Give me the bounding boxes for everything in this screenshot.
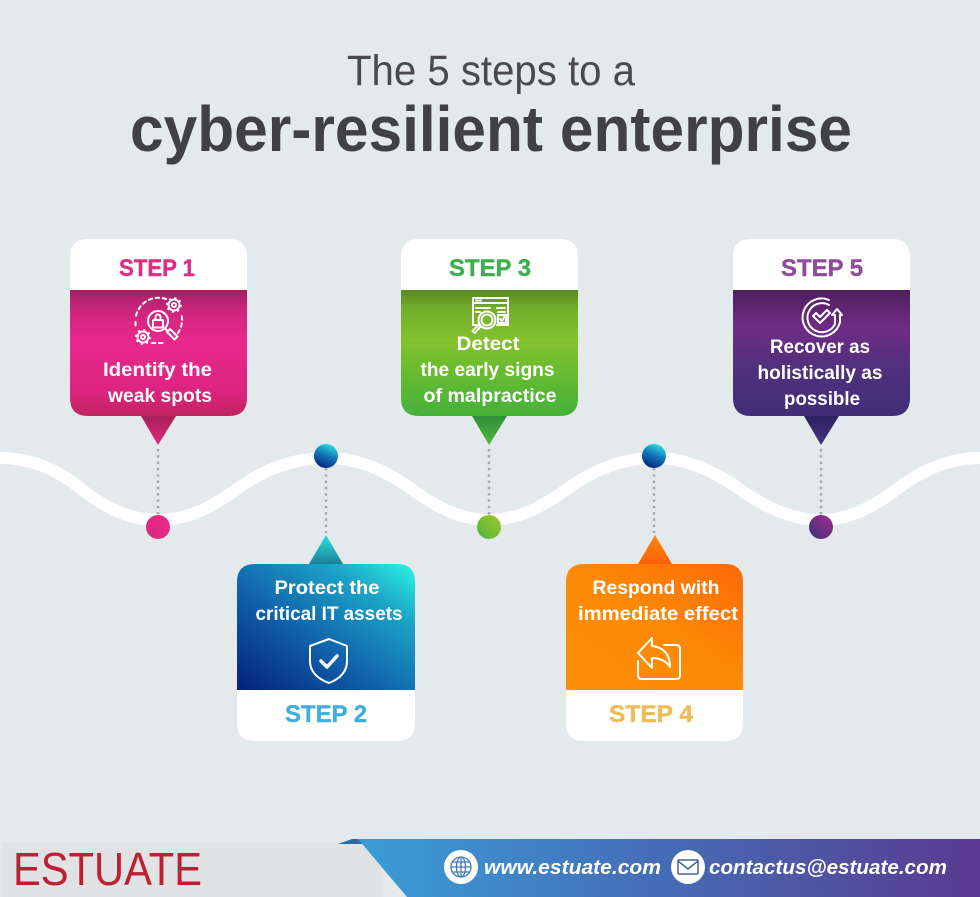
icon: globe: [444, 850, 478, 884]
text: step 3: of malpractice: [424, 386, 556, 407]
email: contactus@estuate.com: [709, 857, 947, 879]
icon: circular arrow with check: [803, 298, 842, 336]
marker: step 1: [146, 515, 170, 539]
text: step 2: critical IT assets: [256, 604, 402, 625]
title: cyber-resilient enterprise: [130, 93, 852, 165]
marker: step 3: [477, 515, 501, 539]
panel: step 4: [566, 535, 743, 741]
heading: step 3: STEP 3: [449, 255, 531, 282]
connector: step 5: [820, 449, 822, 516]
connector: step 1: [157, 449, 159, 516]
icon: shield with check: [310, 639, 347, 683]
logo: ESTUATE: [13, 843, 202, 895]
icon: magnifier with lock and gears: [136, 298, 182, 344]
panel: step 1: [70, 239, 247, 445]
heading: step 2: STEP 2: [285, 701, 367, 728]
text: step 4: immediate effect: [578, 604, 739, 625]
marker: step 4: [642, 444, 666, 468]
text: step 2: Protect the: [274, 578, 380, 599]
title: [130, 47, 852, 165]
title: The 5 steps to a: [347, 47, 635, 95]
text: step 3: [420, 334, 556, 407]
text: step 5: possible: [784, 389, 860, 410]
marker: step 5: [809, 515, 833, 539]
connector: step 2: [325, 468, 327, 533]
icon: envelope: [671, 850, 705, 884]
text: step 1: Identify the: [103, 360, 212, 381]
text: step 2: [256, 578, 402, 625]
marker: step 2: [314, 444, 338, 468]
panel: step 5: [733, 239, 910, 445]
website: www.estuate.com: [484, 857, 661, 879]
timeline wave: [0, 458, 980, 520]
text: step 1: [103, 360, 212, 407]
heading: step 5: STEP 5: [781, 255, 863, 282]
panel: step 2: [237, 535, 415, 741]
text: step 4: Respond with: [592, 578, 720, 599]
text: step 1: weak spots: [107, 386, 212, 407]
heading: step 1: STEP 1: [119, 255, 195, 282]
text: step 5: [758, 337, 882, 410]
heading: step 4: STEP 4: [609, 701, 694, 728]
text: step 5: Recover as: [770, 337, 870, 358]
footer band: [2, 839, 980, 897]
connector: step 4: [653, 468, 655, 533]
text: step 5: holistically as: [758, 363, 882, 384]
text: step 3: the early signs: [420, 360, 554, 381]
icon: reply arrow in a box: [638, 638, 680, 679]
text: step 4: [578, 578, 739, 625]
text: step 3: Detect: [456, 334, 520, 355]
icon: browser window with magnifier: [472, 298, 508, 333]
connector: step 3: [488, 449, 490, 516]
panel: step 3: [401, 239, 578, 445]
